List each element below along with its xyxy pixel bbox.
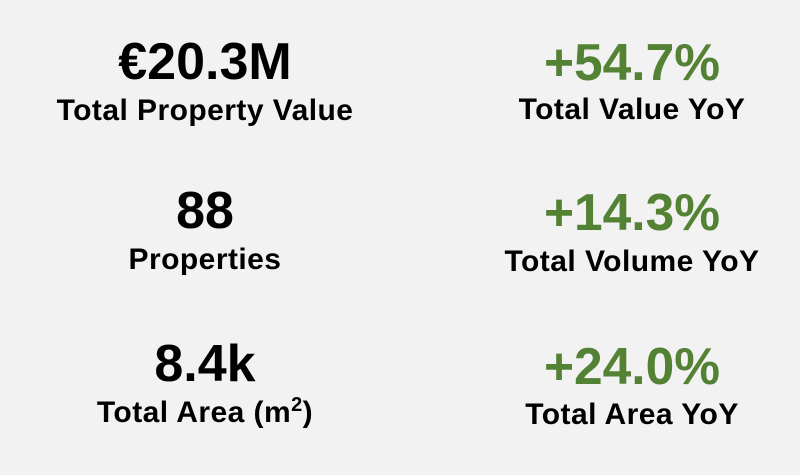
metric: total property value [56, 33, 353, 127]
label: total area YoY: Total Area YoY [525, 398, 739, 431]
value: total volume YoY: +14.3% [544, 183, 720, 241]
label: total volume YoY: Total Volume YoY [504, 245, 760, 278]
metric: total area YoY [525, 337, 739, 431]
metric: total volume YoY [504, 183, 760, 278]
label: total value YoY: Total Value YoY [519, 93, 745, 126]
value: total area: 8.4k [154, 335, 256, 393]
label: total property value: Total Property Value [57, 94, 353, 127]
value: total area YoY: +24.0% [544, 337, 720, 395]
value: properties: 88 [176, 182, 234, 240]
label: properties: Properties [129, 243, 281, 276]
metric: total value YoY [518, 33, 745, 126]
metric: properties [129, 182, 281, 276]
metric: total area [97, 335, 313, 429]
label: total area: Total Area (m2) [97, 394, 313, 429]
value: total value YoY: +54.7% [544, 33, 720, 91]
value: total property value: €20.3M [118, 33, 292, 91]
